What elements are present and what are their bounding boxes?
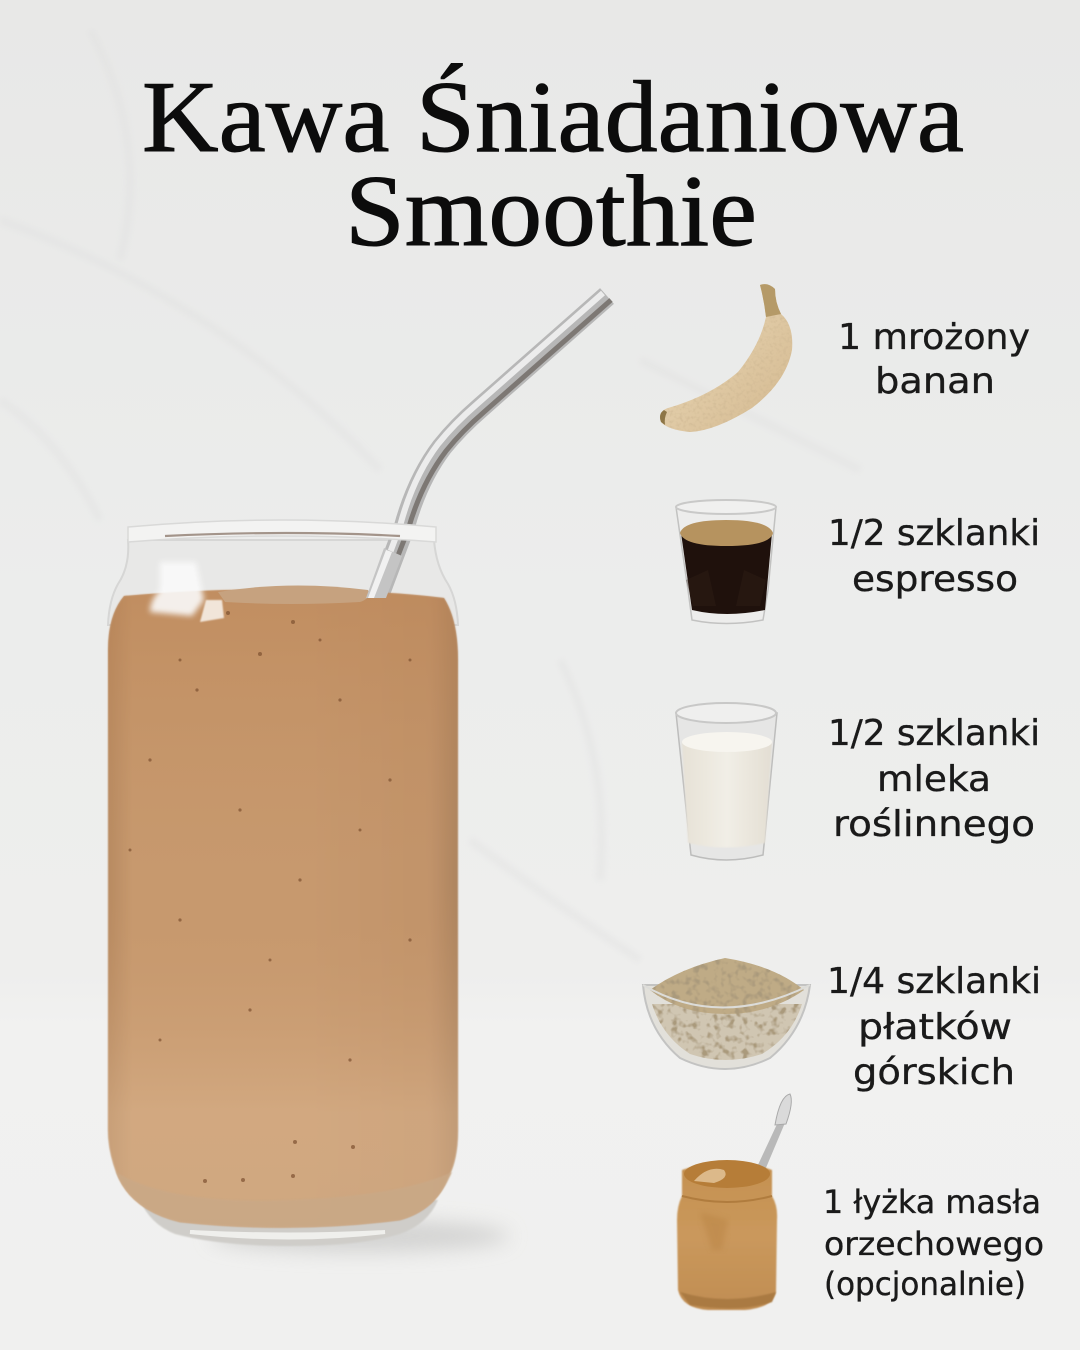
label: plant milk: 1/2 szklanki	[828, 713, 1040, 754]
label: plant milk: roślinnego	[833, 804, 1035, 845]
glass foot	[140, 1200, 438, 1246]
smoothie lower band	[116, 1172, 452, 1228]
label: oats	[827, 961, 1041, 1093]
label: plant milk: mleka	[877, 759, 991, 800]
glass shadow	[210, 1220, 510, 1252]
title: Kawa Śniadaniowa	[142, 61, 964, 174]
straw tip in smoothie	[366, 548, 402, 598]
label: peanut butter: orzechowego	[824, 1225, 1044, 1263]
title: Smoothie	[345, 155, 757, 268]
smoothie top surface	[218, 585, 369, 604]
icon: espresso glass	[676, 500, 776, 624]
label: oats: 1/4 szklanki	[827, 961, 1041, 1002]
smoothie speckles	[128, 611, 412, 1183]
title	[142, 61, 964, 268]
label: espresso: espresso	[852, 559, 1018, 600]
label: banana: banan	[875, 361, 995, 402]
label: oats: górskich	[853, 1052, 1015, 1093]
label: peanut butter: 1 łyżka masła	[823, 1183, 1041, 1221]
glass rim	[128, 520, 436, 542]
label: espresso	[828, 513, 1040, 600]
glass shoulders behind	[108, 540, 458, 625]
straw	[376, 293, 611, 594]
label: peanut butter: (opcjonalnie)	[824, 1265, 1026, 1303]
label: banana	[838, 317, 1030, 402]
smoothie body	[108, 590, 458, 1228]
smoothie glass with straw	[108, 293, 611, 1252]
label: oats: płatków	[858, 1007, 1012, 1048]
label: peanut butter	[823, 1183, 1044, 1303]
icon: banana	[660, 284, 792, 432]
label: espresso: 1/2 szklanki	[828, 513, 1040, 554]
icon: glass of plant milk	[676, 703, 777, 860]
icon: bowl of oats	[643, 958, 810, 1069]
label: banana: 1 mrożony	[838, 317, 1030, 358]
glass highlights	[150, 562, 204, 616]
label: plant milk	[828, 713, 1040, 845]
icon: peanut butter jar with spoon	[677, 1094, 791, 1310]
